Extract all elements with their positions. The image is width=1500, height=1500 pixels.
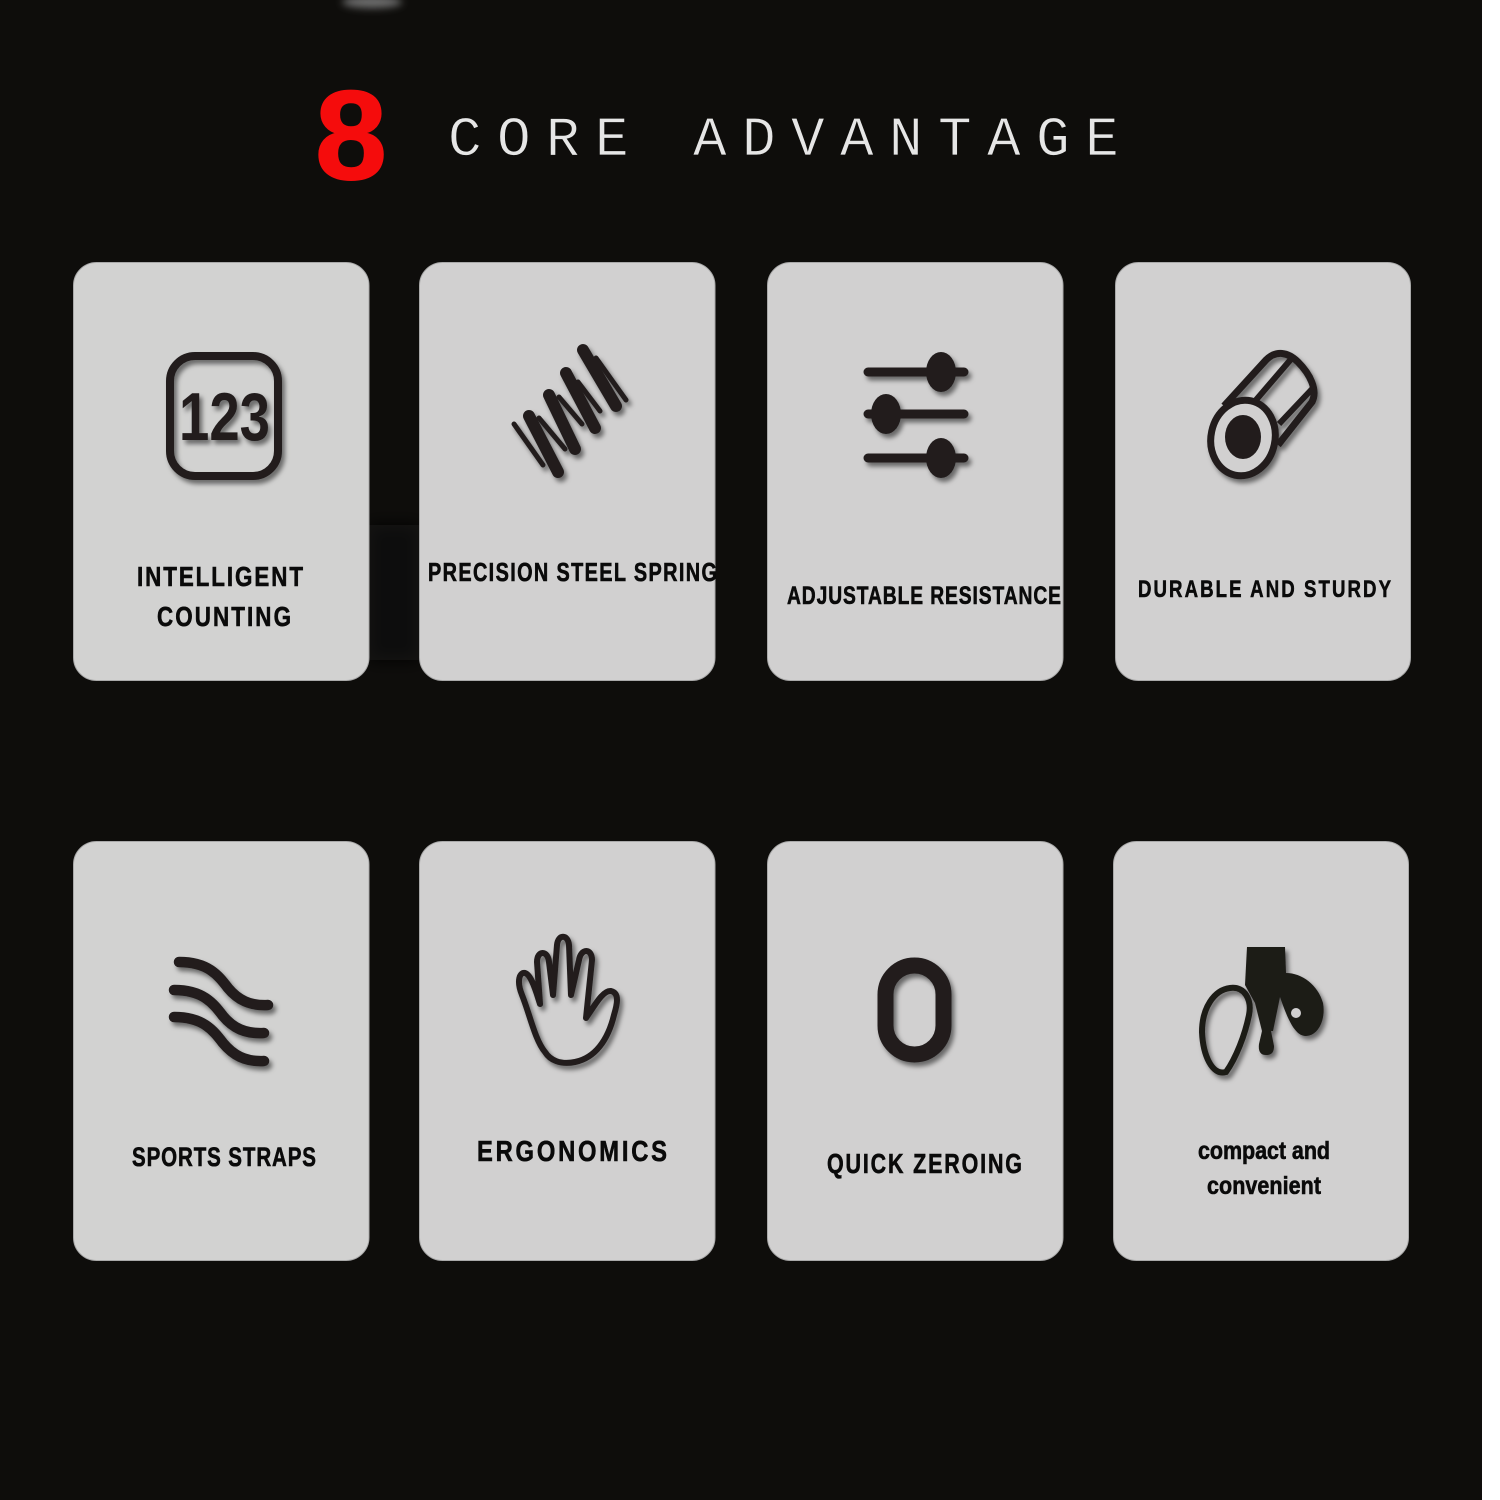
icon: cylinder (1204, 353, 1314, 482)
card (420, 842, 715, 1260)
panel: compact and convenient (1114, 842, 1408, 1260)
label line 2: COUNTING (157, 602, 291, 633)
icon: hand (519, 937, 617, 1063)
panel: precision steel spring (420, 262, 717, 680)
panel: intelligent counting (74, 262, 369, 680)
panel: quick zeroing (768, 842, 1063, 1260)
title text: CORE ADVANTAGE (448, 108, 1134, 172)
icon: 123 counter: 123 (179, 379, 270, 455)
icon: device with strap (1202, 947, 1324, 1072)
title number: 8 (315, 64, 387, 206)
label: ERGONOMICS (477, 1135, 667, 1168)
label: DURABLE AND STURDY (1138, 574, 1391, 603)
card (1114, 842, 1408, 1260)
panel: ergonomics (420, 842, 715, 1260)
panel: adjustable resistance (768, 262, 1063, 680)
label line 2: convenient (1207, 1171, 1321, 1199)
label: SPORTS STRAPS (132, 1142, 316, 1173)
label: ADJUSTABLE RESISTANCE (787, 582, 1061, 610)
card (74, 842, 369, 1260)
card (1116, 262, 1410, 680)
card (420, 262, 715, 680)
icon: spring (514, 350, 626, 472)
label: PRECISION STEEL SPRING (428, 558, 717, 587)
icon: straps (174, 962, 268, 1061)
title (315, 64, 1134, 206)
label: compact and (1198, 1136, 1330, 1164)
label: QUICK ZEROING (827, 1150, 1022, 1180)
icon: 123 counter (170, 356, 278, 476)
card (768, 262, 1063, 680)
panel: durable and sturdy (1116, 262, 1410, 680)
icon: zero (886, 966, 944, 1054)
card (768, 842, 1063, 1260)
label: INTELLIGENT (137, 562, 303, 593)
card (74, 262, 369, 680)
panel: sports straps (74, 842, 369, 1260)
icon: sliders (868, 352, 964, 478)
